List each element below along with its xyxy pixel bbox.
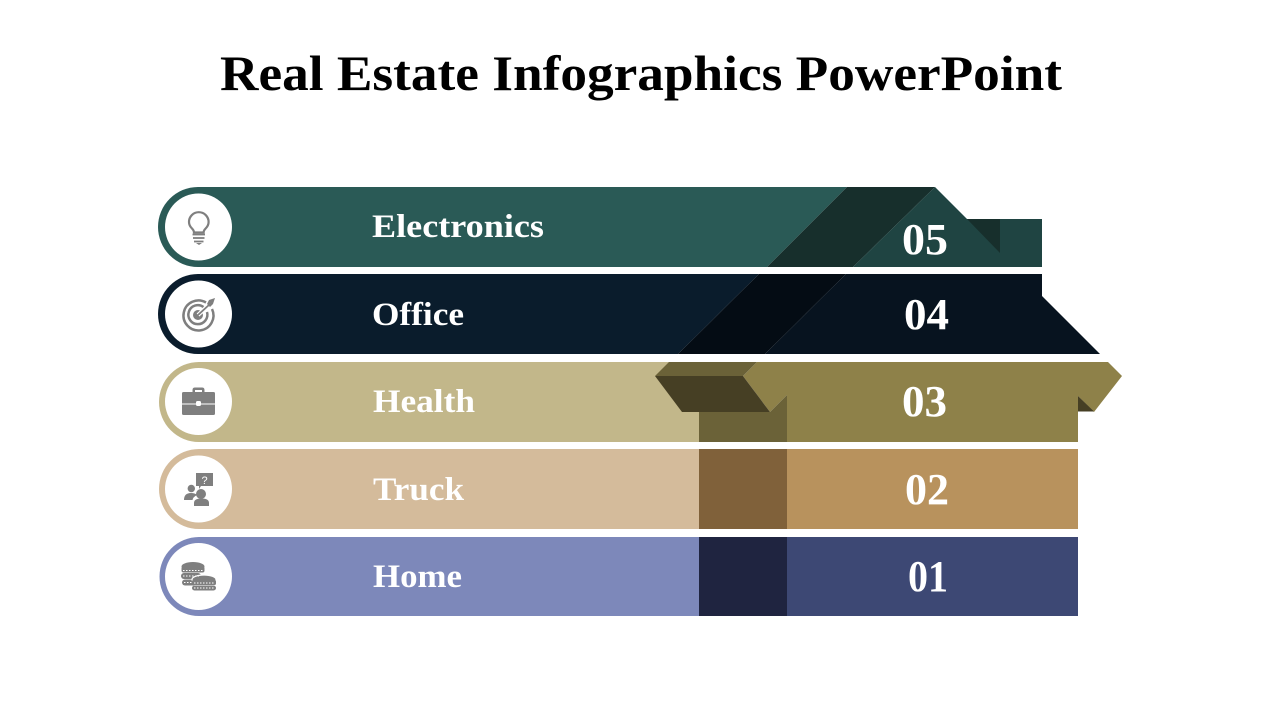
row 04 dark fold bbox=[678, 274, 846, 354]
row 03 lower fold bbox=[699, 395, 787, 442]
row 03 number: 03 bbox=[902, 377, 947, 426]
row 01 label: Home bbox=[373, 559, 462, 595]
row 03 label: Health bbox=[373, 384, 475, 420]
row 03 base bar bbox=[159, 362, 699, 442]
row 05 dark fold bbox=[767, 187, 935, 267]
icon: people with question bubble: ? bbox=[202, 475, 208, 487]
panel: row 03 Health bbox=[159, 362, 1122, 442]
row 02 number: 02 bbox=[905, 465, 949, 514]
icon: coins bbox=[165, 543, 232, 610]
row 05 notch shadow bbox=[967, 219, 1000, 253]
panel: row 02 Truck bbox=[159, 449, 1078, 529]
row 05 base bar bbox=[158, 187, 847, 267]
row 02 number block bbox=[787, 449, 1078, 529]
row 02 dark fold bbox=[699, 449, 787, 529]
row 04 number: 04 bbox=[904, 290, 949, 339]
row 01 base bar bbox=[160, 537, 699, 616]
icon: briefcase bbox=[165, 368, 232, 435]
row 03 right shadow bbox=[1078, 396, 1094, 412]
row 03 number block with arrow bbox=[743, 362, 1122, 442]
icon: target with arrow bbox=[165, 280, 232, 348]
row 01 dark fold bbox=[699, 537, 787, 616]
panel: row 05 Electronics bbox=[158, 187, 1042, 267]
row 02 base bar bbox=[159, 449, 699, 529]
row 01 number block bbox=[787, 537, 1078, 616]
title: Real Estate Infographics PowerPoint bbox=[220, 45, 1062, 101]
row 04 number block with arrow bbox=[765, 274, 1100, 354]
panel: row 04 Office bbox=[158, 274, 1100, 354]
row 01 number: 01 bbox=[908, 552, 948, 601]
row 05 label: Electronics bbox=[372, 209, 544, 245]
panel: row 01 Home bbox=[160, 537, 1078, 616]
icon: people with question bubble bbox=[165, 456, 232, 522]
row 05 number block with arrow bbox=[853, 187, 1042, 267]
row 05 number: 05 bbox=[902, 215, 948, 264]
row 03 upper fold bbox=[655, 362, 757, 376]
row 02 label: Truck bbox=[373, 472, 465, 508]
row 04 label: Office bbox=[372, 297, 464, 333]
row 03 dark fold bbox=[655, 376, 770, 412]
icon: light bulb bbox=[165, 194, 232, 260]
row 04 base bar bbox=[158, 274, 759, 354]
